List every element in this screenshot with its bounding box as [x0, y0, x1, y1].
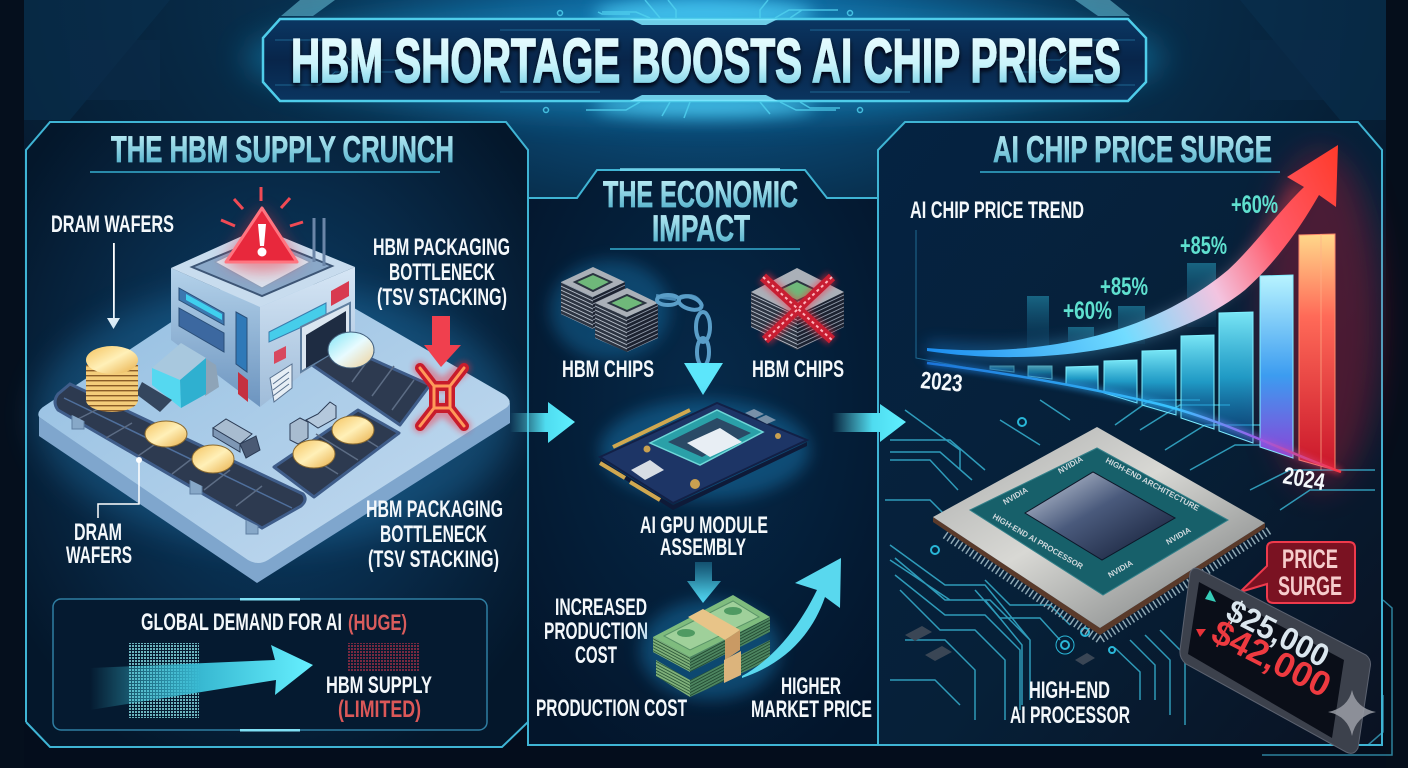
price change labels	[1063, 191, 1278, 325]
isometric factory	[35, 187, 515, 583]
label: DRAM wafers bottom: WAFERS	[66, 542, 132, 569]
label: higher market price: MARKET PRICE	[751, 696, 872, 723]
wall machine	[270, 364, 292, 402]
heading: IMPACT	[652, 208, 750, 249]
label: DRAM wafers bottom	[66, 519, 132, 569]
title banner	[244, 0, 1164, 118]
arrow: impact to surge	[832, 404, 906, 442]
red glow behind peak	[1260, 150, 1380, 490]
chip markings: NVIDIA	[1002, 485, 1030, 507]
label: bottleneck top: HBM PACKAGING	[373, 234, 510, 261]
label: increased production cost: COST	[575, 642, 617, 669]
label: higher market price	[751, 673, 872, 723]
label: HBM chips left: HBM CHIPS	[562, 356, 654, 383]
price change labels: +60%	[1063, 297, 1112, 325]
label: production cost: PRODUCTION COST	[536, 695, 687, 722]
panel: AI chip price surge	[878, 122, 1392, 755]
bottleneck X icon	[420, 368, 464, 426]
label: DRAM wafers top: DRAM WAFERS	[51, 211, 174, 238]
chip markings: NVIDIA	[1056, 454, 1085, 476]
chip markings: HIGH-END AI PROCESSOR	[991, 512, 1085, 571]
icon: HBM chip stacks	[550, 260, 670, 360]
pcb components	[905, 626, 1095, 665]
ghost background bars	[1027, 263, 1216, 351]
circuit board traces	[885, 400, 1375, 725]
arrow: DRAM wafers down	[107, 243, 120, 329]
label: AI GPU module assembly: ASSEMBLY	[660, 534, 746, 561]
demand dot grid	[128, 643, 199, 718]
price display device	[1180, 568, 1370, 753]
alert triangle icon	[215, 187, 310, 288]
conveyor: short front	[274, 410, 399, 497]
label: bottleneck bottom	[366, 496, 503, 573]
outer corner trace	[1262, 600, 1392, 755]
banner glow	[244, 2, 1164, 114]
icon: crossed-out HBM chips	[751, 268, 844, 350]
label: bottleneck bottom: BOTTLENECK	[380, 521, 487, 548]
panel heading: THE HBM SUPPLY CRUNCH	[111, 129, 454, 170]
arrow: down to GPU	[684, 363, 723, 395]
new price: $42,000	[1205, 612, 1337, 705]
supply dot grid	[347, 643, 419, 672]
loading door	[301, 303, 350, 372]
pins	[945, 530, 1270, 640]
label: HBM chips right: HBM CHIPS	[752, 356, 844, 383]
up and down indicators	[1205, 590, 1216, 602]
panel frame	[878, 122, 1382, 745]
panel: the economic impact	[528, 168, 880, 745]
label: bottleneck top: BOTTLENECK	[389, 259, 495, 286]
platform	[35, 260, 515, 583]
arrow: to cost	[687, 562, 721, 603]
label: bottleneck top	[373, 234, 510, 311]
limited label: (LIMITED)	[338, 696, 421, 723]
factory building	[171, 218, 355, 407]
wafers	[145, 332, 374, 473]
callout: price surge: PRICE	[1282, 544, 1338, 574]
icon: chain	[656, 294, 710, 366]
callout: price surge: SURGE	[1278, 571, 1342, 601]
label: increased production cost	[544, 594, 648, 669]
heading: AI CHIP PRICE SURGE	[993, 129, 1272, 170]
supply label: HBM SUPPLY	[326, 672, 432, 699]
huge label: (HUGE)	[348, 610, 407, 635]
chart bars	[990, 234, 1335, 470]
old price: $25,000	[1221, 592, 1335, 674]
panel frame	[528, 170, 880, 745]
icon: GPU module	[600, 400, 810, 510]
label: high-end AI processor	[1010, 677, 1130, 729]
label: AI chip price trend: AI CHIP PRICE TREND	[910, 197, 1084, 224]
demand label: GLOBAL DEMAND FOR AI	[141, 609, 342, 636]
chart ghost frame	[916, 230, 990, 372]
chip markings: HIGH-END ARCHITECTURE	[1104, 456, 1201, 513]
chip markings	[991, 454, 1201, 580]
heading: THE ECONOMIC	[603, 174, 798, 215]
floor line glow	[927, 363, 1341, 472]
banner inner circuit	[275, 30, 1135, 92]
label: bottleneck bottom: HBM PACKAGING	[366, 496, 503, 523]
processor chip	[933, 427, 1270, 640]
price change labels: +60%	[1231, 191, 1278, 219]
price change labels: +85%	[1100, 273, 1148, 301]
label: higher market price: HIGHER	[781, 673, 841, 700]
callout: price surge	[1240, 542, 1355, 603]
chimneys	[314, 218, 324, 266]
chip markings: NVIDIA	[1164, 525, 1193, 547]
label: high-end AI processor: AI PROCESSOR	[1010, 702, 1130, 729]
label: high-end AI processor: HIGH-END	[1029, 677, 1110, 704]
label: DRAM wafers bottom: DRAM	[74, 519, 122, 546]
price change labels: +85%	[1180, 232, 1227, 260]
demand vs supply box	[53, 598, 487, 732]
cyan process box	[136, 343, 219, 412]
banner frame	[263, 19, 1146, 101]
label: increased production cost: INCREASED	[555, 594, 647, 621]
label: bottleneck top: (TSV STACKING)	[377, 284, 507, 311]
label: bottleneck bottom: (TSV STACKING)	[368, 546, 499, 573]
wafer stack	[86, 346, 138, 412]
conveyor: back	[312, 345, 430, 425]
icon: cash stacks	[640, 595, 780, 700]
arrow: supply to impact	[510, 402, 575, 443]
icon: sparkle watermark	[1328, 690, 1376, 736]
wall panels	[179, 288, 224, 325]
trend arrow	[927, 145, 1338, 357]
floor line	[927, 363, 1341, 472]
banner circuit traces	[544, 0, 862, 118]
trend arrow glow	[927, 185, 1300, 353]
chip markings: NVIDIA	[1106, 558, 1135, 580]
trend chart	[916, 145, 1341, 472]
demand arrow	[90, 645, 313, 710]
bottleneck red arrow	[424, 316, 461, 367]
label: 2023: 2023	[919, 367, 964, 398]
conveyor: long	[55, 384, 305, 534]
label: increased production cost: PRODUCTION	[544, 618, 648, 645]
heading	[603, 174, 800, 250]
label: 2024: 2024	[1281, 462, 1328, 496]
label: AI GPU module assembly: AI GPU MODULE	[640, 512, 768, 539]
panel frame	[26, 122, 528, 747]
arrow: to higher market price	[742, 558, 841, 678]
panel: the HBM supply crunch	[26, 122, 528, 747]
leader line: DRAM wafers	[98, 457, 142, 518]
small machines	[213, 402, 336, 458]
label: AI GPU module assembly	[640, 512, 768, 561]
